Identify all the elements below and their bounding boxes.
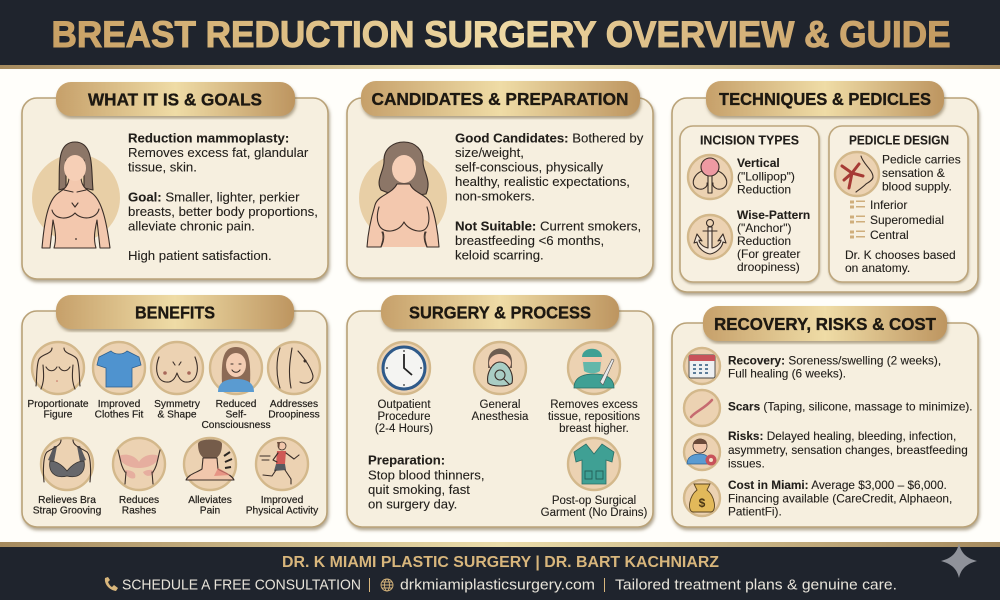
step: outpatient: Outpatient bbox=[377, 399, 431, 411]
benefit: rashes: Rashes bbox=[122, 506, 156, 516]
benefit: clothes fit: Improved bbox=[98, 399, 141, 410]
benefit: activity bbox=[246, 438, 319, 516]
icon: anchor incision bbox=[688, 215, 732, 259]
text: preparation: quit smoking, fast bbox=[368, 482, 470, 497]
row: recovery: Full healing (6 weeks). bbox=[728, 366, 846, 380]
step: anesthesia bbox=[472, 342, 529, 423]
footer website: drkmiamiplasticsurgery.com bbox=[400, 578, 595, 594]
row: risks: issues. bbox=[728, 456, 765, 470]
text: dr k note: on anatomy. bbox=[845, 261, 910, 275]
heading: techniques and pedicles bbox=[706, 81, 944, 116]
text: definition and goals: High patient satisfaction. bbox=[128, 248, 272, 263]
step: anesthesia: General bbox=[480, 399, 520, 411]
heading: candidates and preparation bbox=[361, 81, 640, 116]
row: cost: $ bbox=[699, 496, 706, 510]
benefit: clothes fit bbox=[93, 342, 145, 420]
heading: what it is and goals: WHAT IT IS & GOALS bbox=[88, 90, 262, 110]
step: outpatient bbox=[375, 342, 433, 435]
step: removes tissue: breast higher. bbox=[559, 423, 629, 435]
panel: benefits bbox=[22, 295, 327, 527]
text: candidates: Not Suitable: bbox=[455, 218, 536, 234]
heading: recovery risks and cost: RECOVERY, RISKS & COST bbox=[714, 314, 936, 334]
sub-panel: pedicle design bbox=[829, 126, 968, 282]
benefit: activity: Improved bbox=[261, 495, 304, 506]
heading: what it is and goals bbox=[56, 82, 295, 116]
footer tagline: Tailored treatment plans & genuine care. bbox=[615, 578, 897, 594]
text: wise pattern: droopiness) bbox=[737, 260, 800, 274]
sub-heading: pedicle design: PEDICLE DESIGN bbox=[849, 132, 949, 148]
benefit: bra strap bbox=[33, 438, 102, 516]
list: pedicle types: Central bbox=[870, 228, 909, 242]
icon: phone bbox=[105, 577, 118, 591]
footer title: DR. K MIAMI PLASTIC SURGERY | DR. BART KACHNIARZ bbox=[282, 554, 720, 571]
text: wise pattern: ("Anchor") bbox=[737, 221, 792, 235]
illustration: woman torso bbox=[32, 142, 120, 248]
heading: surgery and process bbox=[381, 295, 619, 329]
step: garment: Post-op Surgical bbox=[552, 495, 636, 507]
text: wise pattern: Wise-Pattern bbox=[737, 208, 810, 222]
text: candidates: healthy, realistic expectations, bbox=[455, 174, 630, 189]
heading: benefits bbox=[56, 295, 294, 329]
text: wise pattern: (For greater bbox=[737, 247, 800, 261]
text: candidates: breastfeeding <6 months, bbox=[455, 233, 604, 248]
row: scars: (Taping, silicone, massage to minimize). bbox=[760, 400, 973, 414]
list: pedicle types: Superomedial bbox=[870, 213, 944, 227]
text: dr k note: Dr. K chooses based bbox=[845, 248, 956, 262]
sub-panel: incision types bbox=[680, 126, 819, 282]
benefit: pain bbox=[184, 438, 236, 516]
row: recovery bbox=[684, 348, 941, 384]
row: cost bbox=[684, 478, 952, 518]
benefit: pain: Pain bbox=[200, 506, 220, 516]
row: recovery: Recovery: bbox=[728, 354, 785, 368]
text: definition and goals: Reduction mammoplasty: bbox=[128, 130, 289, 146]
benefit: self consciousness: Self- bbox=[226, 410, 246, 420]
text: preparation: on surgery day. bbox=[368, 496, 457, 512]
panel: what it is and goals bbox=[22, 82, 328, 279]
benefit: bra strap: Strap Grooving bbox=[33, 506, 102, 516]
text: candidates: size/weight, bbox=[455, 145, 524, 160]
text: pedicle description: sensation & bbox=[882, 166, 945, 180]
list: pedicle types: Inferior bbox=[870, 198, 907, 212]
benefit: self consciousness: Consciousness bbox=[201, 420, 271, 431]
row: cost: Cost in Miami: bbox=[728, 478, 809, 492]
text: candidates: Bothered by bbox=[569, 130, 644, 146]
text: pedicle description: Pedicle carries bbox=[882, 152, 961, 166]
text: candidates: Current smokers, bbox=[536, 218, 641, 234]
row: cost: PatientFi). bbox=[728, 504, 782, 518]
step: garment bbox=[541, 438, 648, 519]
benefit: symmetry: & Shape bbox=[157, 410, 197, 420]
heading: surgery and process: SURGERY & PROCESS bbox=[409, 302, 591, 322]
text: candidates: keloid scarring. bbox=[455, 248, 544, 262]
benefit: pain: Alleviates bbox=[188, 495, 232, 506]
row: cost: Average $3,000 – $6,000. bbox=[809, 478, 947, 492]
benefit: droopiness: Droopiness bbox=[268, 410, 320, 420]
benefit: clothes fit: Clothes Fit bbox=[95, 410, 144, 420]
row: recovery: Soreness/swelling (2 weeks), bbox=[785, 354, 941, 368]
row: cost: Financing available (CareCredit, Alphaeon, bbox=[728, 492, 952, 506]
benefit: rashes bbox=[113, 438, 165, 516]
text: definition and goals: Goal: bbox=[128, 190, 162, 204]
sub-heading: incision types: INCISION TYPES bbox=[700, 132, 799, 148]
illustration: woman with larger breasts bbox=[359, 142, 447, 247]
benefit: rashes: Reduces bbox=[119, 495, 159, 506]
text: preparation: Stop blood thinners, bbox=[368, 468, 484, 482]
benefit: proportionate figure: Figure bbox=[44, 410, 73, 420]
benefit: bra strap: Relieves Bra bbox=[38, 495, 96, 506]
text: definition and goals: Removes excess fat, glandular bbox=[128, 145, 309, 160]
text: definition and goals: tissue, skin. bbox=[128, 160, 197, 174]
benefit: droopiness bbox=[268, 342, 320, 420]
text: definition and goals: alleviate chronic pain. bbox=[128, 218, 255, 234]
text: candidates: Good Candidates: bbox=[455, 130, 569, 146]
step: outpatient: Procedure bbox=[377, 411, 431, 423]
benefit: symmetry bbox=[151, 342, 203, 420]
step: removes tissue: tissue, repositions bbox=[548, 411, 640, 423]
heading: recovery risks and cost bbox=[703, 306, 947, 341]
row: scars bbox=[684, 390, 973, 426]
text: candidates: self-conscious, physically bbox=[455, 160, 603, 174]
step: removes tissue: Removes excess bbox=[550, 399, 638, 411]
heading: techniques and pedicles: TECHNIQUES & PEDICLES bbox=[719, 89, 931, 109]
text: pedicle description: blood supply. bbox=[882, 180, 952, 194]
step: outpatient: (2-4 Hours) bbox=[375, 423, 433, 435]
text: vertical: Vertical bbox=[737, 156, 780, 170]
icon: globe bbox=[381, 579, 393, 591]
row: scars: Scars bbox=[728, 400, 761, 414]
row: risks: Risks: bbox=[728, 429, 763, 443]
title: BREAST REDUCTION SURGERY OVERVIEW & GUIDE bbox=[52, 14, 950, 55]
benefit: proportionate figure bbox=[27, 342, 89, 420]
text: definition and goals: breasts, better body proportions, bbox=[128, 204, 318, 219]
text: preparation: Preparation: bbox=[368, 452, 445, 468]
footer call to action: SCHEDULE A FREE CONSULTATION bbox=[122, 578, 361, 594]
text: vertical: ("Lollipop") bbox=[737, 170, 795, 184]
heading: candidates and preparation: CANDIDATES & PREPARATION bbox=[372, 89, 628, 109]
step: removes tissue bbox=[548, 342, 640, 435]
benefit: proportionate figure: Proportionate bbox=[27, 399, 89, 410]
row: risks bbox=[684, 429, 968, 470]
text: vertical: Reduction bbox=[737, 182, 791, 196]
header banner bbox=[0, 0, 1000, 69]
benefit: self consciousness: Reduced bbox=[216, 399, 257, 410]
footer banner bbox=[0, 542, 1000, 600]
step: anesthesia: Anesthesia bbox=[472, 411, 529, 423]
icon: lollipop incision bbox=[688, 155, 732, 199]
step: garment: Garment (No Drains) bbox=[541, 507, 648, 519]
icon: pedicle bbox=[835, 152, 879, 196]
benefit: activity: Physical Activity bbox=[246, 506, 319, 516]
benefit: symmetry: Symmetry bbox=[154, 399, 201, 410]
footer separators bbox=[370, 578, 604, 592]
text: definition and goals: Smaller, lighter, perkier bbox=[162, 190, 300, 204]
heading: benefits: BENEFITS bbox=[135, 302, 215, 322]
list: pedicle types bbox=[850, 198, 947, 242]
panel: techniques and pedicles bbox=[672, 81, 978, 292]
icon: sparkle bbox=[941, 543, 977, 578]
panel: recovery risks and cost bbox=[672, 306, 978, 527]
row: risks: Delayed healing, bleeding, infection, bbox=[763, 429, 956, 443]
row: risks: asymmetry, sensation changes, breastfeeding bbox=[728, 443, 968, 457]
panel: candidates and preparation bbox=[347, 81, 653, 278]
panel: surgery and process bbox=[347, 295, 653, 527]
text: candidates: non-smokers. bbox=[455, 188, 535, 204]
text: wise pattern: Reduction bbox=[737, 234, 791, 248]
benefit: self consciousness bbox=[201, 342, 271, 431]
benefit: droopiness: Addresses bbox=[270, 399, 318, 410]
